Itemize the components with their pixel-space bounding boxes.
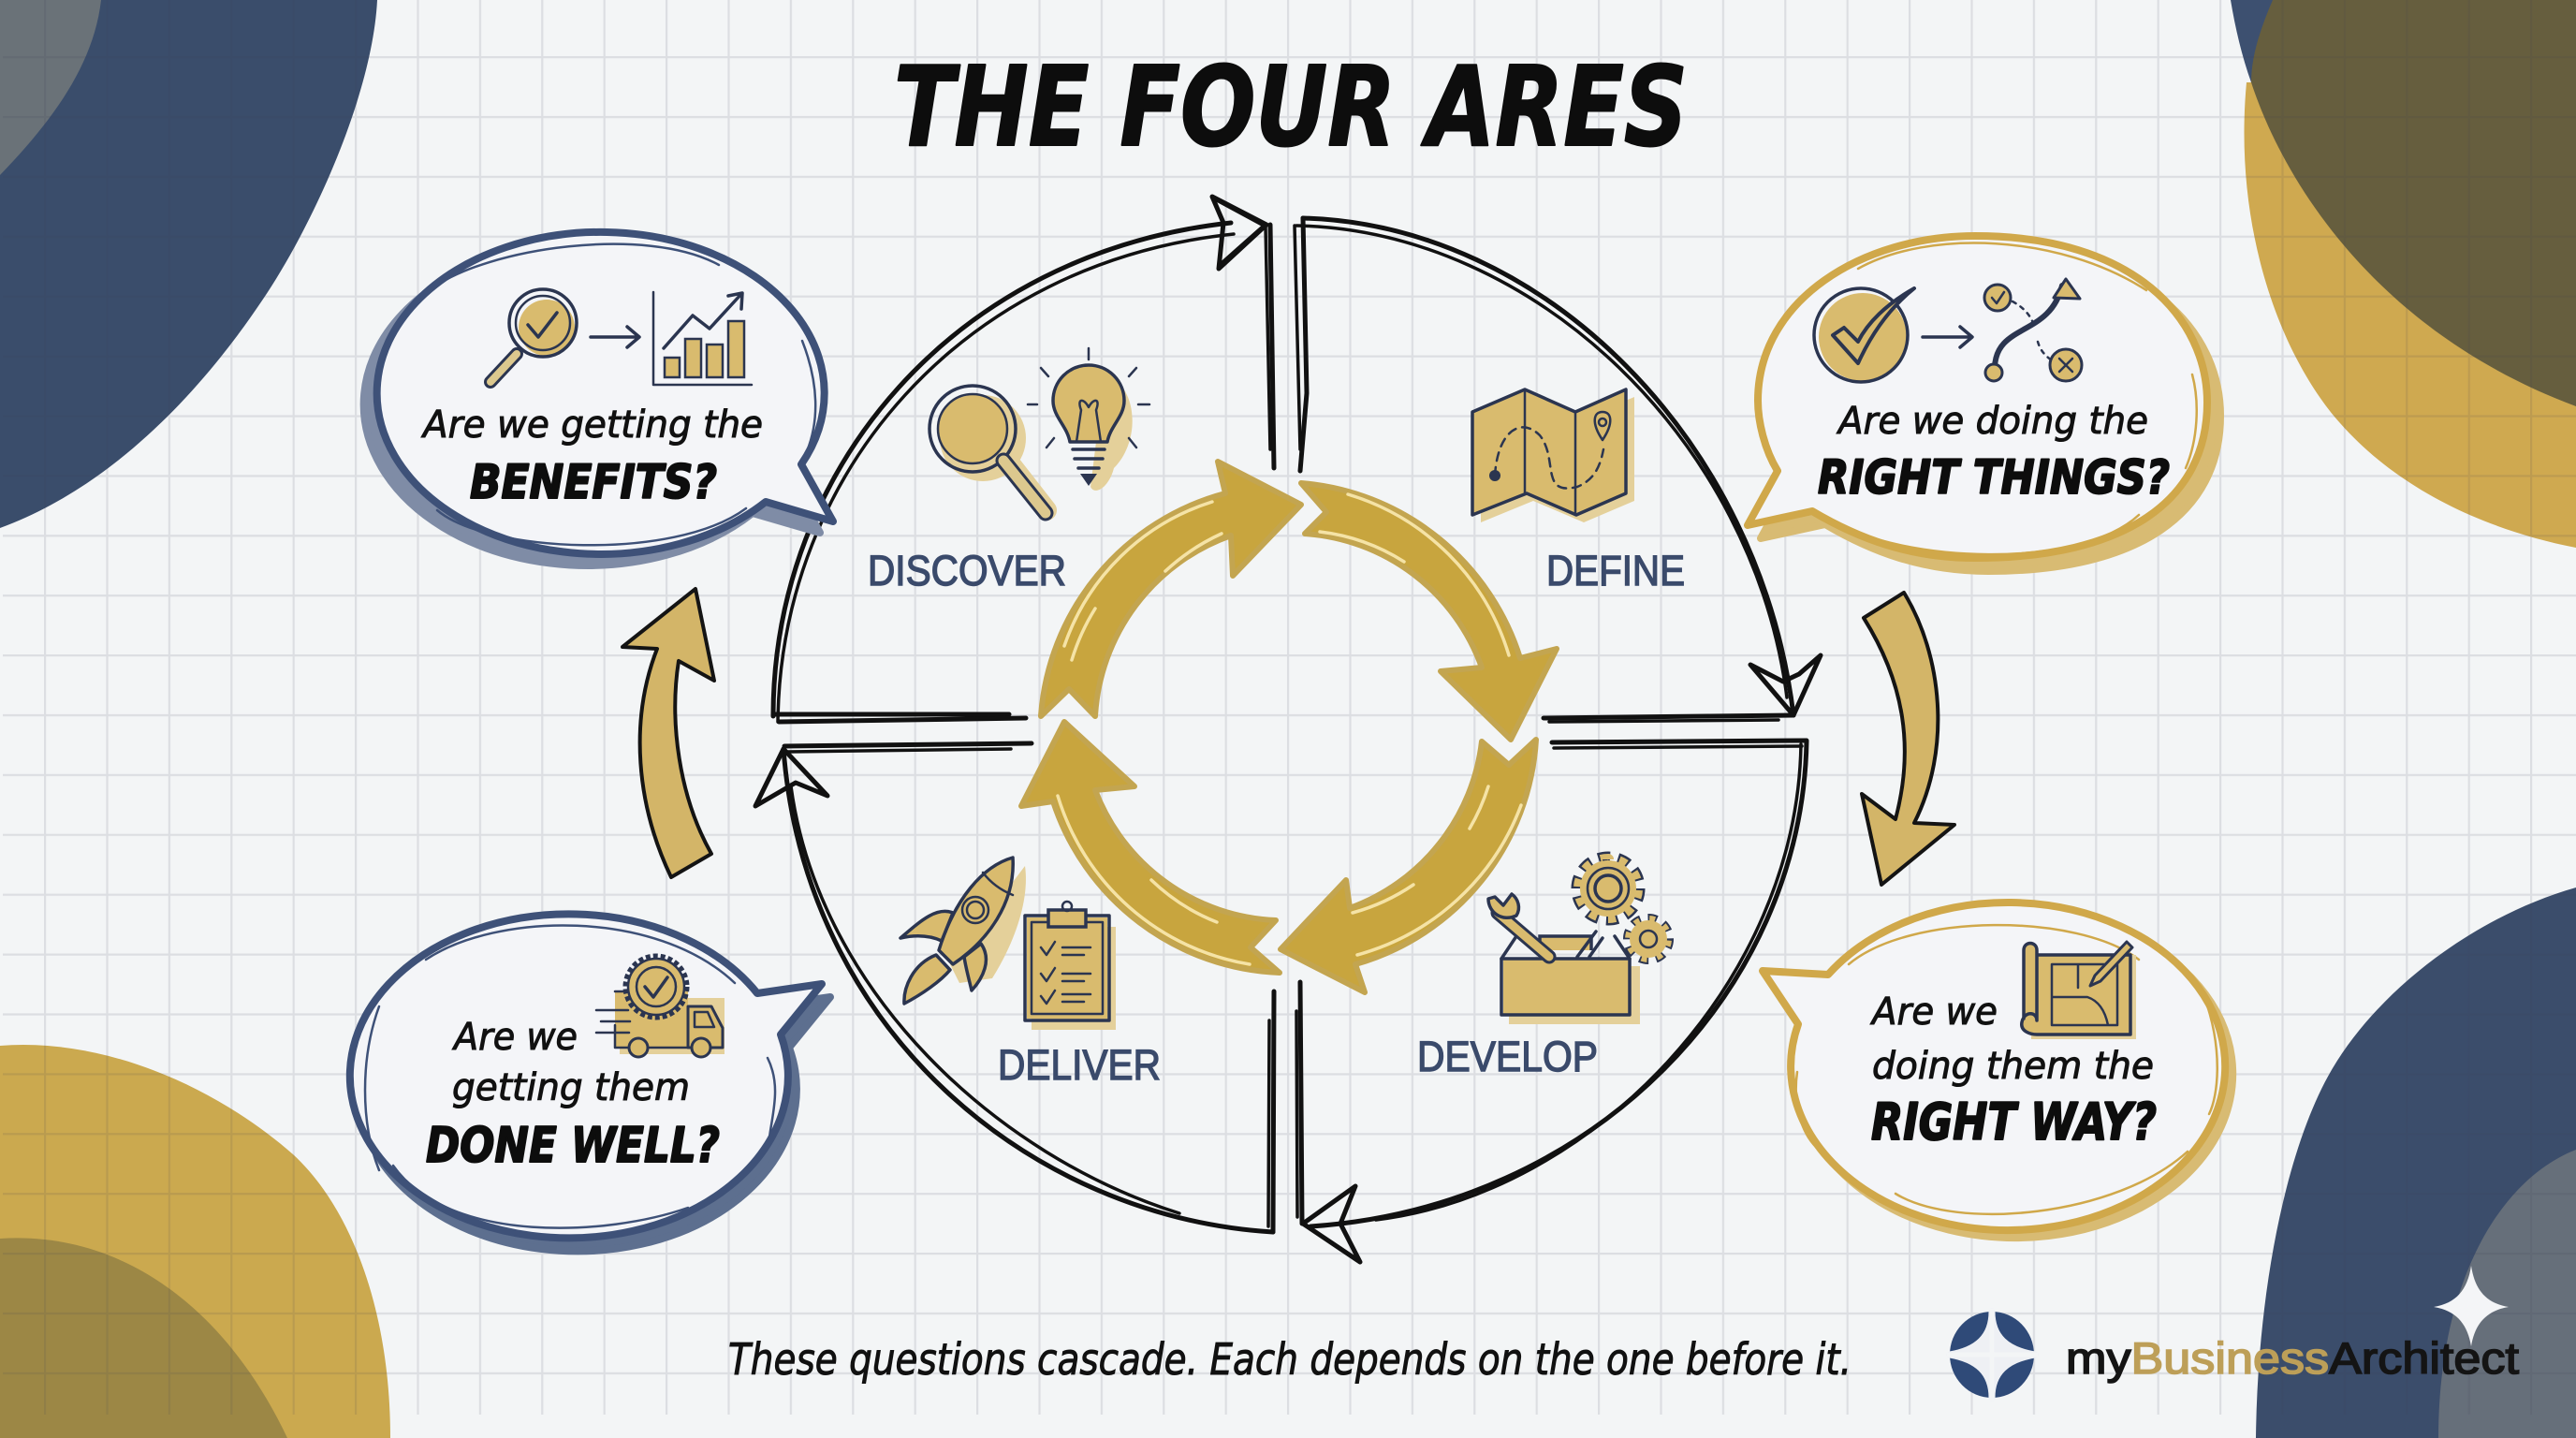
corner shape: bottom left gold — [0, 1045, 390, 1438]
icon: toolbox with gears — [1488, 859, 1668, 1024]
footer note: These questions cascade. Each depends on the one before it. — [728, 1334, 1852, 1385]
icon: sparkle — [2434, 1266, 2509, 1346]
speech bubble: done well — [350, 914, 830, 1251]
title: THE FOUR ARES — [894, 42, 1688, 171]
question text: right things: Are we doing the — [1836, 400, 2148, 443]
question text: benefits: BENEFITS? — [470, 455, 717, 509]
label: deliver: DELIVER — [998, 1041, 1161, 1089]
icon: folded map — [1472, 389, 1634, 522]
quadrant: deliver outline with arrow — [755, 743, 1274, 1232]
corner shape: top right navy and gold — [2231, 0, 2576, 548]
question text: done well: DONE WELL? — [426, 1118, 720, 1174]
quadrant: develop outline with arrow — [1296, 741, 1807, 1262]
gold arrow: discover to define — [1041, 462, 1301, 716]
quadrant: discover outline with arrow — [773, 197, 1274, 722]
logo wordmark: myBusiness Architect — [2066, 1333, 2519, 1383]
quadrant: define outline with arrow — [1295, 218, 1821, 722]
question text: right things — [1818, 400, 2170, 505]
icon: rocket and clipboard — [900, 858, 1116, 1030]
question text: done well: getting them — [452, 1066, 690, 1109]
corner shape: bottom right navy — [2256, 888, 2576, 1438]
question text: benefits — [420, 404, 763, 509]
label: define: DEFINE — [1546, 547, 1685, 594]
gold arrow: define to develop — [1301, 483, 1557, 740]
corner shape: top left navy — [0, 0, 377, 528]
gold arrow: develop to deliver — [1281, 740, 1536, 992]
question text: done well — [426, 1016, 720, 1174]
logo mark — [1947, 1309, 2038, 1401]
label: discover: DISCOVER — [868, 547, 1066, 594]
question text: right way: doing them the — [1872, 1045, 2154, 1088]
question text: right way — [1869, 990, 2157, 1152]
speech bubble: benefits — [364, 232, 833, 565]
gold arrow: deliver to discover — [1021, 722, 1280, 973]
speech bubble: right way — [1763, 902, 2232, 1238]
icon: delivery truck with badge — [596, 956, 724, 1057]
central cycle arrows — [1021, 462, 1557, 992]
icon: blueprint and pencil — [2021, 942, 2136, 1039]
side arrow: up to benefits — [622, 589, 714, 877]
label: develop: DEVELOP — [1417, 1033, 1598, 1080]
question text: right way: Are we — [1869, 990, 1998, 1034]
icon: magnifier to rising chart — [490, 289, 752, 385]
side arrow: down to right way — [1862, 593, 1954, 885]
speech bubble: right things — [1748, 236, 2220, 571]
question text: done well: Are we — [451, 1016, 578, 1059]
question text: right things: RIGHT THINGS? — [1818, 450, 2170, 505]
icon: magnifier and light bulb — [929, 348, 1149, 513]
large quadrant circle — [755, 197, 1821, 1262]
question text: benefits: Are we getting the — [420, 404, 763, 447]
question text: right way: RIGHT WAY? — [1871, 1093, 2157, 1152]
icon: checkmark to route choice — [1814, 279, 2082, 382]
